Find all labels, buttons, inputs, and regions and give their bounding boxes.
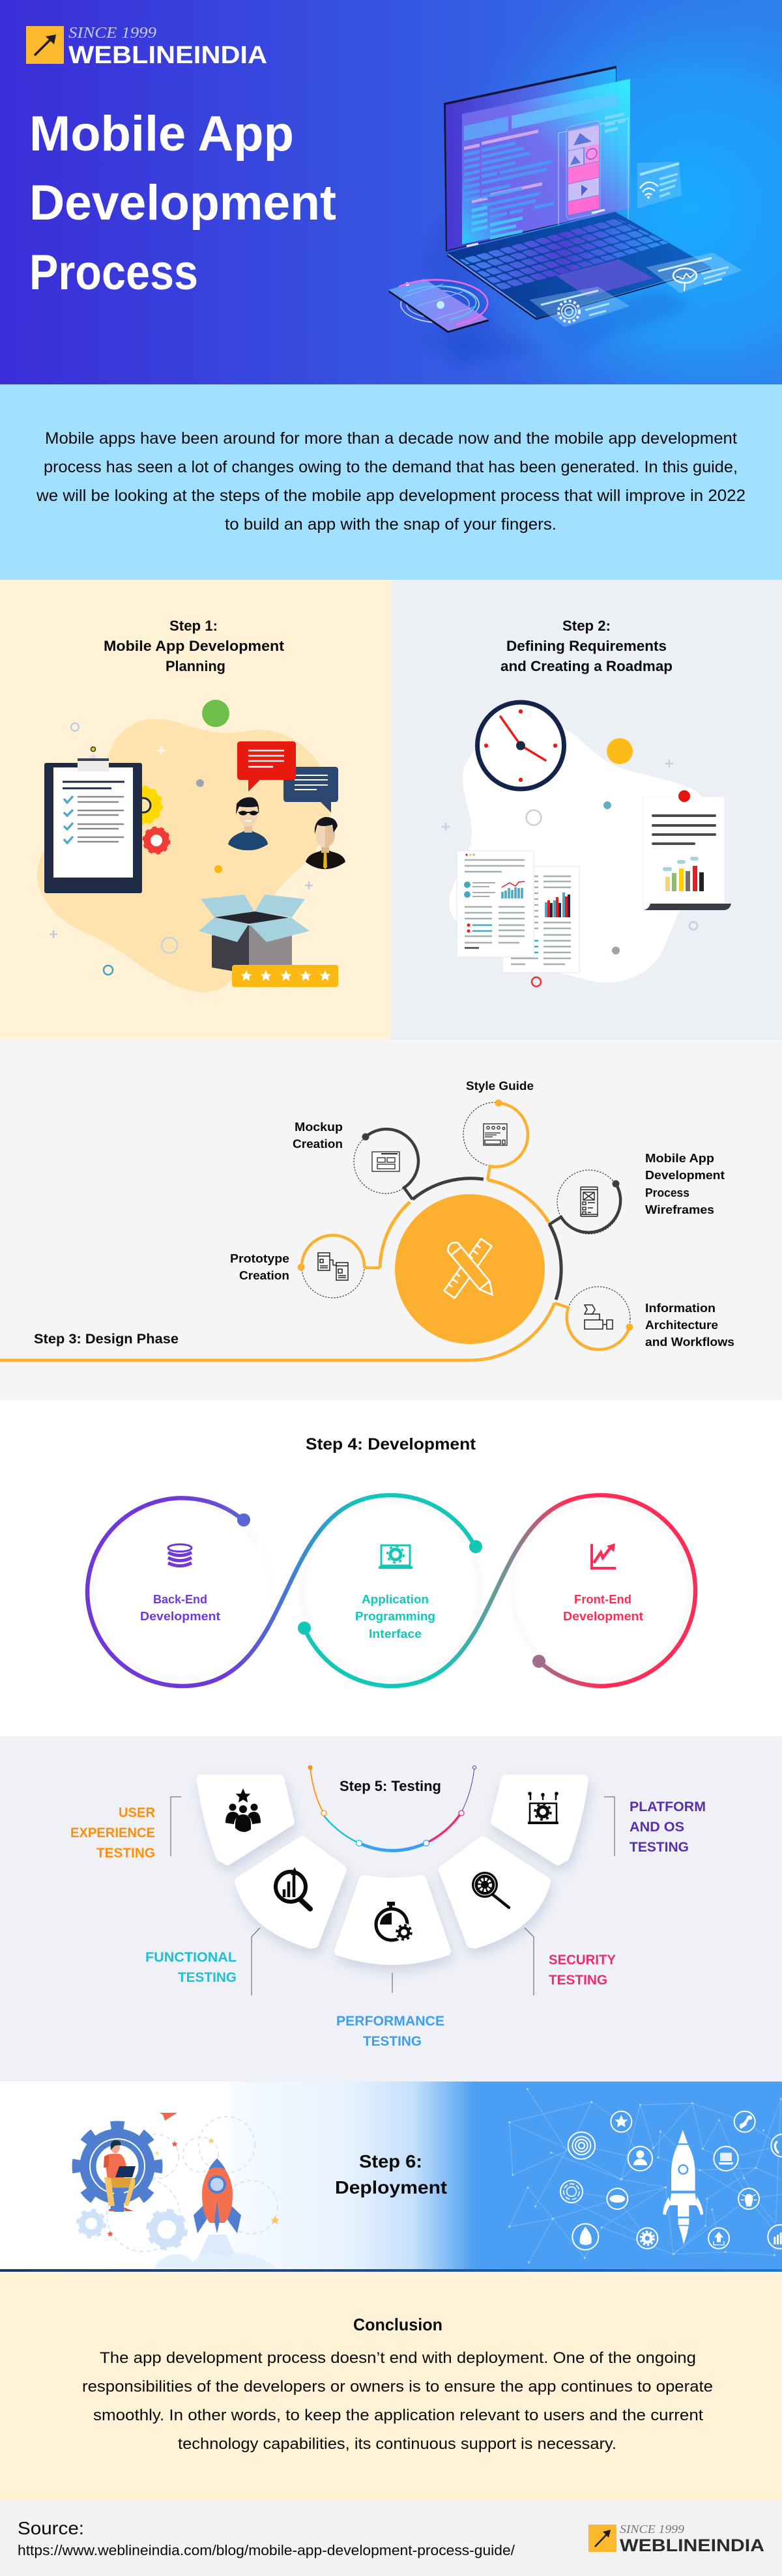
floating panel: chart [646, 253, 742, 293]
curved stepper arc [308, 1766, 476, 1850]
panel: conclusion [0, 2272, 782, 2500]
item: back-end development: Development [140, 1609, 220, 1623]
icon: yellow and red gears [126, 788, 169, 853]
panel: introduction: to build an app with the snap of your fingers. [225, 515, 557, 534]
node: mockup creation [293, 1121, 418, 1199]
title [29, 106, 336, 300]
label: security testing: SECURITY [549, 1952, 616, 1968]
icon: rocket [154, 2158, 277, 2268]
item: back-end development [140, 1544, 220, 1623]
label: functional testing: FUNCTIONAL [145, 1949, 237, 1965]
leader lines [171, 1797, 615, 1996]
heading: step 2: Step 2: [562, 618, 611, 634]
phone with wireless rings [388, 279, 489, 333]
screen hinges [467, 210, 605, 246]
node: information architecture: and Workflows [645, 1336, 734, 1349]
title: Process [29, 245, 198, 300]
label: performance testing: PERFORMANCE [336, 2013, 444, 2029]
node: wireframes: Wireframes [645, 1203, 714, 1216]
panel: introduction: Mobile apps have been around for more than a decade now and the mobile app development [45, 429, 737, 448]
title: Development [29, 175, 336, 231]
node: wireframes: Development [645, 1169, 725, 1182]
node: wireframes: Mobile App [645, 1152, 714, 1165]
logo: Weblineindia footer: SINCE 1999 [620, 2523, 684, 2536]
node: wireframes: Process [645, 1186, 689, 1199]
logo: Weblineindia: SINCE 1999 [68, 25, 156, 42]
heading: step 6: Deployment [335, 2177, 447, 2197]
heading: step 2: Defining Requirements [506, 638, 667, 654]
panel: step 3 design phase [0, 1040, 782, 1401]
panel: step 5 testing [0, 1736, 782, 2082]
trackpad [556, 259, 654, 296]
node: mockup creation: Mockup [295, 1121, 343, 1134]
rating bar [232, 965, 338, 987]
laptop deck [447, 212, 711, 319]
title: Mobile App [29, 106, 294, 162]
panel: conclusion: Conclusion [353, 2315, 442, 2334]
logo: Weblineindia: WEBLINEINDIA [68, 42, 267, 69]
heading: step 3: Step 3: Design Phase [34, 1332, 179, 1347]
panel: conclusion: smoothly. In other words, to keep the application relevant to users and the current [93, 2407, 703, 2424]
node: information architecture [555, 1287, 734, 1351]
label: platform and os testing: TESTING [630, 1839, 689, 1855]
keyboard keys [459, 218, 669, 291]
s-curve track [87, 1495, 695, 1686]
card: security [443, 1840, 546, 1944]
panel: conclusion: responsibilities of the developers or owners is to ensure the app continues to operate [82, 2378, 713, 2396]
label: functional testing [145, 1949, 237, 1985]
node: wireframes [549, 1152, 725, 1234]
heading: step 1: Planning [166, 658, 225, 674]
panel: conclusion: The app development process doesn’t end with deployment. One of the ongoing [100, 2349, 696, 2367]
logo: Weblineindia footer: WEBLINEINDIA [620, 2536, 764, 2555]
panel: introduction: process has seen a lot of changes owing to the demand that has been generated. In this guide, [44, 458, 738, 476]
icon: front document [457, 851, 534, 957]
panel: footer source: Source: [18, 2518, 84, 2538]
panel: footer source: https://www.weblineindia.com/blog/mobile-app-development-process-guide/ [18, 2542, 515, 2558]
node: prototype creation [230, 1235, 380, 1298]
panel: step 2 requirements [391, 580, 782, 1040]
item: application programming interface: Interface [369, 1627, 422, 1640]
label: performance testing: TESTING [363, 2033, 422, 2049]
heading: step 6: Step 6: [359, 2151, 422, 2171]
panel: step 1 planning [0, 580, 391, 1040]
logo: Weblineindia [26, 25, 267, 69]
illustration: laptop with floating panels [388, 66, 742, 365]
icon: small gears [78, 2211, 185, 2248]
glass screen [462, 79, 630, 244]
icon: gear with developer [77, 2126, 158, 2212]
panel: header [0, 0, 782, 384]
item: front-end development [563, 1543, 643, 1623]
node: information architecture: Information [645, 1302, 716, 1315]
heading: step 2: and Creating a Roadmap [500, 658, 673, 674]
heading: step 4: Step 4: Development [306, 1435, 476, 1453]
label: security testing [549, 1952, 616, 1988]
central orange disc with crossed pencil and ruler [395, 1194, 545, 1344]
panel: step 4 development [0, 1401, 782, 1736]
heading: step 1: Step 1: [169, 618, 218, 634]
network of connected icons [508, 2088, 782, 2263]
item: application programming interface: Programming [355, 1609, 435, 1623]
item: back-end development: Back-End [153, 1592, 207, 1606]
label: platform and os testing [630, 1799, 706, 1855]
heading: step 2 [500, 618, 673, 674]
node: mockup creation: Creation [293, 1138, 343, 1151]
screen content [464, 91, 628, 257]
icon: clipboard checklist [44, 747, 142, 893]
node: prototype creation: Creation [239, 1269, 289, 1282]
panel: step 6 deployment [0, 2082, 782, 2272]
ring track around disc [0, 1179, 561, 1360]
heading: step 5: Step 5: Testing [340, 1778, 441, 1794]
label: platform and os testing: PLATFORM [630, 1799, 706, 1814]
heading: step 1: Mobile App Development [104, 638, 285, 654]
item: front-end development: Front-End [574, 1592, 631, 1606]
card: platform and os [495, 1779, 584, 1861]
card: user experience [201, 1779, 290, 1861]
floating panel: wifi [637, 162, 682, 208]
icon: open box [199, 894, 310, 974]
icon: paper plane [160, 2113, 177, 2121]
label: user experience testing [70, 1805, 155, 1861]
icon: person with tie [306, 817, 345, 869]
floating panel: settings [529, 287, 630, 327]
label: user experience testing: EXPERIENCE [70, 1825, 155, 1840]
label: user experience testing: TESTING [96, 1845, 155, 1861]
label: performance testing [336, 2013, 444, 2049]
label: functional testing: TESTING [178, 1969, 237, 1985]
panel: introduction [0, 384, 782, 580]
icon: blue chat bubble [283, 767, 338, 812]
node: information architecture: Architecture [645, 1319, 718, 1332]
label: security testing: TESTING [549, 1972, 607, 1988]
heading: step 6 [335, 2151, 447, 2197]
item: application programming interface [355, 1545, 435, 1640]
icon: person with sunglasses [228, 797, 268, 850]
icon: back document [502, 866, 579, 973]
icon: report with bars [643, 790, 731, 910]
node: style guide [463, 1080, 534, 1180]
laptop lid [444, 66, 616, 251]
panel: introduction: we will be looking at the steps of the mobile app development process that will improve in 2022 [36, 487, 746, 505]
logo: Weblineindia footer [588, 2523, 764, 2555]
node: style guide: Style Guide [466, 1080, 534, 1093]
label: user experience testing: USER [119, 1805, 155, 1820]
icon: white rocket [663, 2130, 703, 2244]
dashed orbit circles [107, 2117, 278, 2252]
card: performance [339, 1880, 446, 1960]
icon: small stars [107, 2138, 280, 2237]
icon: red chat bubble [237, 741, 296, 792]
label: platform and os testing: AND OS [630, 1819, 684, 1835]
node: prototype creation: Prototype [230, 1252, 289, 1265]
heading: step 1 [104, 618, 285, 674]
item: application programming interface: Application [362, 1592, 429, 1606]
card: functional [239, 1840, 342, 1944]
item: front-end development: Development [563, 1609, 643, 1623]
icon: clock [477, 702, 564, 789]
panel: footer source [0, 2500, 782, 2576]
panel: conclusion: technology capabilities, its continuous support is necessary. [178, 2435, 616, 2453]
